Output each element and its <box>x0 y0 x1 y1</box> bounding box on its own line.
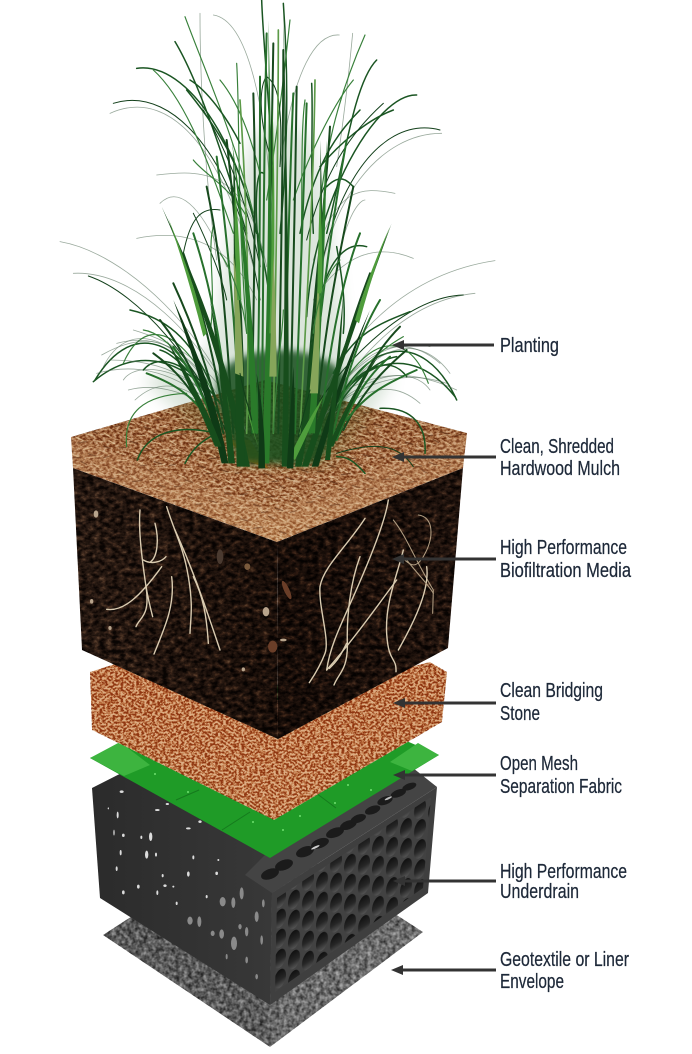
label: geotextile: Envelope <box>500 970 564 993</box>
label: biofiltration media: High Performance <box>500 536 627 559</box>
arrow: mulch <box>392 452 496 462</box>
upper arching blades <box>136 67 268 285</box>
central bundle of blades <box>207 187 233 433</box>
soil left face <box>73 468 278 739</box>
label: planting: Planting <box>500 334 559 357</box>
mesh exposed corners <box>90 742 150 776</box>
label: bridging stone <box>500 679 603 725</box>
mulch top face and front edge <box>71 380 467 542</box>
white specks on left face <box>108 790 219 905</box>
underdrain right face with holes <box>270 787 437 1005</box>
label: geotextile: Geotextile or Liner <box>500 948 629 971</box>
soil right face <box>277 468 463 739</box>
soil flecks <box>90 510 293 671</box>
label: biofiltration media: Biofiltration Media <box>500 559 631 582</box>
left drooping arcs <box>95 343 220 427</box>
mulch light side band <box>71 433 467 542</box>
top strip slots <box>260 781 417 882</box>
underdrain left face <box>92 700 272 1005</box>
plant core <box>217 350 347 463</box>
mulch layer <box>71 380 467 542</box>
biofiltration media cube <box>73 468 463 739</box>
label: mulch: Clean, Shredded <box>500 435 614 458</box>
mulch orange patch at plant base <box>228 440 268 468</box>
open mesh separation fabric <box>90 680 439 858</box>
plume soft mass <box>143 120 393 467</box>
geotextile layer <box>103 830 423 1047</box>
label: bridging stone: Clean Bridging <box>500 679 603 702</box>
roots <box>107 500 433 685</box>
mesh seams <box>176 790 336 830</box>
label: separation fabric <box>500 752 622 798</box>
mesh highlights <box>154 773 372 831</box>
right drooping arcs <box>338 350 458 403</box>
label: bridging stone: Stone <box>500 702 540 725</box>
label: separation fabric: Separation Fabric <box>500 775 622 798</box>
label: separation fabric: Open Mesh <box>500 752 578 775</box>
label: underdrain <box>500 860 627 903</box>
underdrain top strip <box>245 768 437 893</box>
label: underdrain: Underdrain <box>500 880 579 903</box>
plant <box>60 0 495 473</box>
label: mulch <box>500 435 620 480</box>
underdrain block <box>92 700 437 1005</box>
mulch chip texture <box>71 380 467 542</box>
arcs over mulch <box>126 393 187 447</box>
arrow: bridging stone <box>393 698 496 708</box>
arrow: geotextile <box>391 965 496 975</box>
arrow: planting <box>392 340 494 350</box>
bridging stone layer <box>90 662 447 820</box>
label: mulch: Hardwood Mulch <box>500 457 620 480</box>
label: geotextile <box>500 948 629 993</box>
label: underdrain: High Performance <box>500 860 627 883</box>
label: biofiltration media <box>500 536 631 582</box>
arrow: separation fabric <box>393 770 496 780</box>
wide tall blades <box>162 207 250 467</box>
thin grey outer arcs <box>60 242 247 433</box>
arrow: underdrain <box>393 876 496 886</box>
arrow: biofiltration media <box>392 554 496 564</box>
